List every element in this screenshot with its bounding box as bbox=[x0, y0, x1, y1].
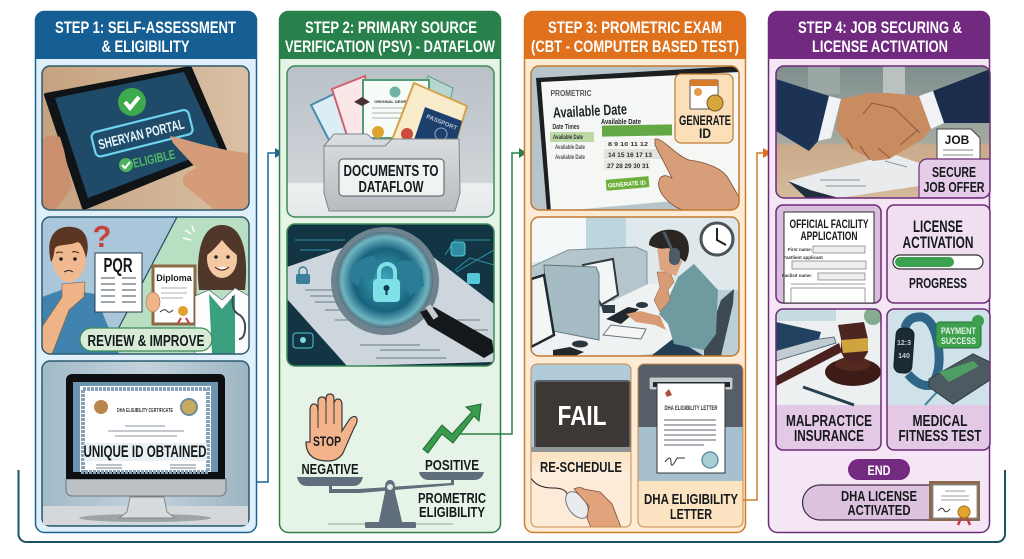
card: medical fitness test: 140 bbox=[898, 353, 910, 360]
panel: step 3 Prometric exam bbox=[524, 11, 746, 532]
heading: step 1: & ELIGIBILITY bbox=[102, 37, 190, 56]
icon: job document: JOB bbox=[945, 133, 970, 147]
badge: DHA license activated bbox=[802, 481, 980, 525]
heading: step 2 bbox=[285, 18, 496, 56]
arrow: step 2 to step 3 bbox=[460, 148, 527, 434]
image: documents folder bbox=[287, 66, 494, 217]
card: official facility application form: Fastlient applicant bbox=[783, 255, 823, 260]
heading: step 2: VERIFICATION (PSV) - DATAFLOW bbox=[285, 37, 496, 56]
card: official facility application form: Faclisit name: bbox=[782, 273, 813, 278]
panel: step 2 primary source verification bbox=[279, 11, 501, 532]
image: unique ID certificate on monitor bbox=[42, 361, 249, 526]
image: review and improve illustration bbox=[42, 217, 249, 354]
callout: secure job offer bbox=[919, 159, 990, 198]
heading: step 4 bbox=[798, 18, 962, 56]
card: license activation progress bbox=[887, 205, 990, 303]
heading: step 4: LICENSE ACTIVATION bbox=[812, 37, 948, 56]
heading: step 1: STEP 1: SELF-ASSESSMENT bbox=[55, 18, 236, 37]
label: documents to dataflow: DOCUMENTS TO bbox=[344, 163, 438, 180]
label: DHA eligibility letter: LETTER bbox=[670, 506, 712, 523]
arrow: step 1 to step 2 bbox=[257, 148, 283, 482]
callout: payment success bbox=[936, 315, 984, 348]
image: Prometric calendar screen: Date Times bbox=[552, 124, 580, 131]
label: re-schedule: RE-SCHEDULE bbox=[540, 459, 622, 476]
card: malpractice insurance bbox=[776, 307, 882, 450]
label: fail: FAIL bbox=[558, 400, 606, 431]
image: fail and re-schedule bbox=[531, 364, 631, 530]
image: Prometric calendar screen: PROMETRIC bbox=[550, 89, 592, 98]
heading: step 3 bbox=[531, 18, 739, 56]
label: documents to dataflow bbox=[339, 159, 444, 196]
label: DHA eligibility letter: DHA ELIGIBILITY bbox=[644, 491, 738, 508]
badge: end bbox=[848, 459, 910, 480]
badge: end: END bbox=[868, 462, 890, 478]
icon: positive green arrow bbox=[423, 404, 481, 453]
label: prometric eligibility: ELIGIBILITY bbox=[419, 504, 485, 521]
image: review and improve illustration: Diploma bbox=[156, 273, 193, 283]
heading: step 1 bbox=[55, 18, 236, 56]
label: review and improve bbox=[80, 328, 212, 351]
image: Prometric calendar screen: Available Date bbox=[555, 155, 585, 161]
image: magnifier with secure globe bbox=[287, 224, 494, 366]
card: medical fitness test: FITNESS TEST bbox=[898, 428, 982, 445]
image: Prometric calendar screen: 27 28 29 30 31 bbox=[607, 164, 650, 170]
icon: balance scale bbox=[297, 472, 484, 528]
image: candidate at computer test centre bbox=[531, 217, 739, 356]
label: unique ID obtained: UNIQUE ID OBTAINED bbox=[84, 442, 206, 461]
panel: step 1 self-assessment and eligibility bbox=[35, 11, 257, 532]
callout: payment success: SUCCESS bbox=[941, 336, 976, 347]
icon: license certificate bbox=[929, 481, 980, 525]
heading: step 3: STEP 3: PROMETRIC EXAM bbox=[548, 18, 722, 37]
callout: secure job offer: JOB OFFER bbox=[924, 179, 985, 196]
card: medical fitness test: 12:3 bbox=[897, 340, 911, 347]
card: license activation progress: PROGRESS bbox=[909, 275, 967, 292]
image: Prometric calendar screen: 14 15 16 17 13 bbox=[608, 153, 653, 159]
image: Prometric calendar screen: Available Date bbox=[555, 145, 585, 151]
icon: stop hand: STOP bbox=[313, 433, 341, 449]
heading: step 3: (CBT - COMPUTER BASED TEST) bbox=[531, 37, 739, 56]
image: Prometric calendar screen: Available Date bbox=[553, 135, 583, 141]
image: review and improve illustration: ? bbox=[93, 219, 111, 254]
card: medical fitness test bbox=[887, 309, 990, 450]
card: official facility application form: APPLICATION bbox=[800, 231, 858, 243]
callout: generate ID: ID bbox=[699, 125, 711, 141]
card: official facility application form bbox=[776, 205, 881, 303]
label: negative: NEGATIVE bbox=[302, 461, 358, 478]
callout: generate ID: GENERATE bbox=[679, 112, 731, 128]
card: official facility application form: OFFICIAL FACILITY bbox=[790, 219, 869, 231]
label: DHA eligibility letter bbox=[644, 494, 738, 519]
image: Prometric calendar screen: Available Date bbox=[553, 101, 627, 122]
image: Prometric calendar screen: Available Date bbox=[601, 119, 641, 126]
callout: generate ID bbox=[675, 74, 733, 143]
panel: step 4 job securing and license activation bbox=[768, 11, 990, 532]
card: license activation progress: LICENSE bbox=[913, 217, 963, 236]
callout: payment success: PAYMENT bbox=[941, 326, 976, 337]
chart: progress bar bbox=[893, 255, 983, 269]
image: DHA eligibility letter bbox=[638, 364, 743, 527]
card: medical fitness test: MEDICAL bbox=[912, 413, 968, 430]
chart: positive and negative balance scale bbox=[297, 394, 486, 528]
image: Prometric calendar screen bbox=[531, 66, 740, 212]
card: official facility application form: First name: bbox=[788, 247, 813, 252]
icon: job document bbox=[937, 129, 980, 162]
image: documents folder: ORIGINAL DEGREE bbox=[374, 99, 412, 104]
image: DHA eligibility letter: DHA ELIGIBILITY LETTER bbox=[664, 405, 718, 412]
connector: return bracket along bottom bbox=[18, 470, 1005, 542]
image: handshake and job offer bbox=[776, 66, 990, 198]
image: Sheryan portal tablet: SHERYAN PORTAL bbox=[97, 115, 186, 152]
card: license activation progress: ACTIVATION bbox=[902, 233, 974, 252]
image: Sheryan portal tablet: ELIGIBLE bbox=[131, 146, 177, 171]
icon: stop hand bbox=[306, 394, 357, 461]
heading: step 2: STEP 2: PRIMARY SOURCE bbox=[305, 18, 477, 37]
image: Prometric calendar screen: GENERATE ID bbox=[608, 180, 647, 190]
image: Prometric calendar screen: 8 9 10 11 12 bbox=[608, 142, 648, 148]
callout: secure job offer: SECURE bbox=[932, 164, 976, 181]
image: documents folder: PASSPORT bbox=[425, 114, 458, 132]
image: review and improve illustration: PQR bbox=[104, 255, 133, 277]
image: unique ID certificate on monitor: DHA ELIGIBILITY CERTIFICATE bbox=[117, 408, 173, 414]
label: documents to dataflow: DATAFLOW bbox=[358, 179, 424, 196]
label: prometric eligibility bbox=[418, 490, 486, 521]
label: positive: POSITIVE bbox=[425, 457, 479, 474]
badge: DHA license activated: DHA LICENSE bbox=[841, 488, 917, 505]
heading: step 4: STEP 4: JOB SECURING & bbox=[798, 18, 962, 37]
card: malpractice insurance: INSURANCE bbox=[794, 428, 864, 445]
image: Sheryan portal tablet bbox=[42, 66, 249, 210]
badge: DHA license activated: ACTIVATED bbox=[848, 502, 911, 519]
arrow: step 3 to step 4 bbox=[743, 148, 772, 500]
card: malpractice insurance: MALPRACTICE bbox=[786, 413, 872, 430]
label: review and improve: REVIEW & IMPROVE bbox=[88, 333, 205, 350]
label: prometric eligibility: PROMETRIC bbox=[418, 490, 486, 507]
